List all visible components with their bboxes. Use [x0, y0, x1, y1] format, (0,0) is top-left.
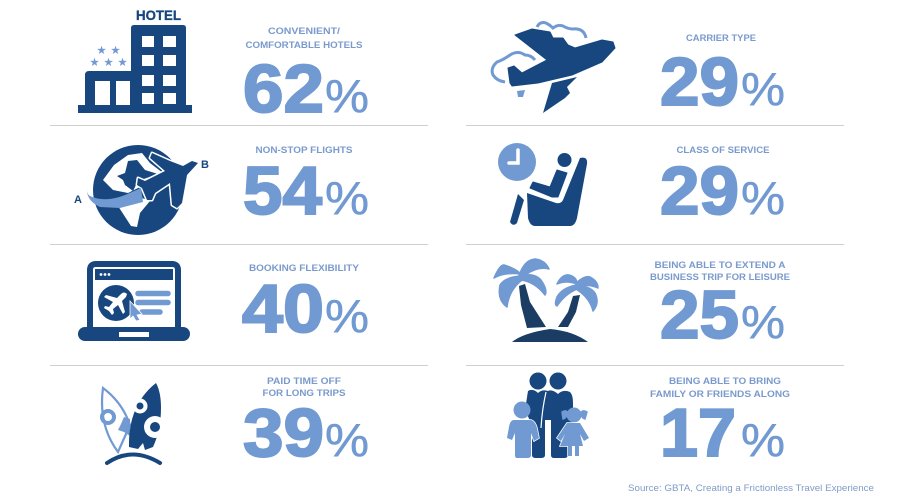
icon: palm island	[494, 259, 598, 342]
label: extend trip for leisure: BUSINESS TRIP FOR LEISURE	[650, 272, 790, 283]
label: non-stop flights: NON-STOP FLIGHTS	[256, 145, 352, 156]
icon: hotel: ★	[110, 43, 121, 57]
icon: hotel: ★	[117, 55, 128, 69]
label: convenient hotels: COMFORTABLE HOTELS	[246, 40, 362, 51]
label: extend trip for leisure: BEING ABLE TO EXTEND A	[654, 260, 786, 271]
stat: 62%: 62	[243, 51, 324, 127]
stat: 25%	[660, 277, 785, 353]
stat: 62%	[243, 51, 369, 127]
stat: 39%: 39	[243, 395, 324, 471]
stat: 40%: %	[325, 290, 369, 342]
stat: 29% class: 29	[660, 153, 739, 229]
icon: hotel: ★	[103, 55, 114, 69]
stat: 25%: %	[741, 296, 785, 348]
stat: 17%: 17	[660, 395, 736, 471]
label: extend trip for leisure	[650, 260, 790, 283]
icon: globe and plane: B	[201, 159, 209, 171]
stat: 40%	[242, 271, 369, 347]
icon: hotel	[78, 8, 192, 113]
label: bring family or friends: BEING ABLE TO BRING	[669, 376, 781, 387]
stat: 62%: %	[325, 70, 369, 122]
stat: 54%: %	[325, 172, 369, 224]
stat: 29% carrier	[660, 44, 785, 120]
stat: 17%	[660, 395, 785, 471]
label: convenient hotels: CONVENIENT/	[268, 26, 340, 37]
stat: 39%: %	[325, 414, 369, 466]
icon: airplane and clouds	[492, 22, 615, 113]
label: class of service: CLASS OF SERVICE	[676, 145, 770, 156]
stat: 29% carrier: 29	[660, 44, 739, 120]
label: convenient hotels	[246, 26, 362, 51]
stat: 17%: %	[741, 414, 785, 466]
icon: hotel: ★	[96, 43, 107, 57]
label: paid time off	[262, 376, 346, 399]
stat: 39%	[243, 395, 369, 471]
icon: hotel: HOTEL	[136, 8, 181, 23]
source note: Source: GBTA, Creating a Frictionless Travel Experience	[628, 483, 874, 494]
label: bring family or friends	[650, 376, 790, 400]
stat: 25%: 25	[660, 277, 739, 353]
stat: 29% carrier: %	[741, 63, 785, 115]
icon: hotel: ★	[89, 55, 100, 69]
icon: globe and plane: A	[74, 194, 82, 206]
label: paid time off: FOR LONG TRIPS	[262, 388, 346, 399]
icon: surfboards	[102, 383, 166, 463]
stat: 29% class: %	[741, 172, 785, 224]
label: carrier type: CARRIER TYPE	[686, 33, 756, 44]
stat: 54%: 54	[243, 153, 322, 229]
label: bring family or friends: FAMILY OR FRIENDS ALONG	[650, 389, 790, 400]
icon: family	[507, 372, 589, 458]
label: paid time off: PAID TIME OFF	[267, 376, 341, 387]
icon: seat and clock	[498, 143, 587, 226]
label: booking flexibility: BOOKING FLEXIBILITY	[249, 263, 360, 274]
icon: globe and plane	[74, 145, 209, 235]
icon: laptop booking	[78, 264, 190, 341]
stat: 40%: 40	[242, 271, 324, 347]
stat: 29% class	[660, 153, 785, 229]
stat: 54%	[243, 153, 369, 229]
